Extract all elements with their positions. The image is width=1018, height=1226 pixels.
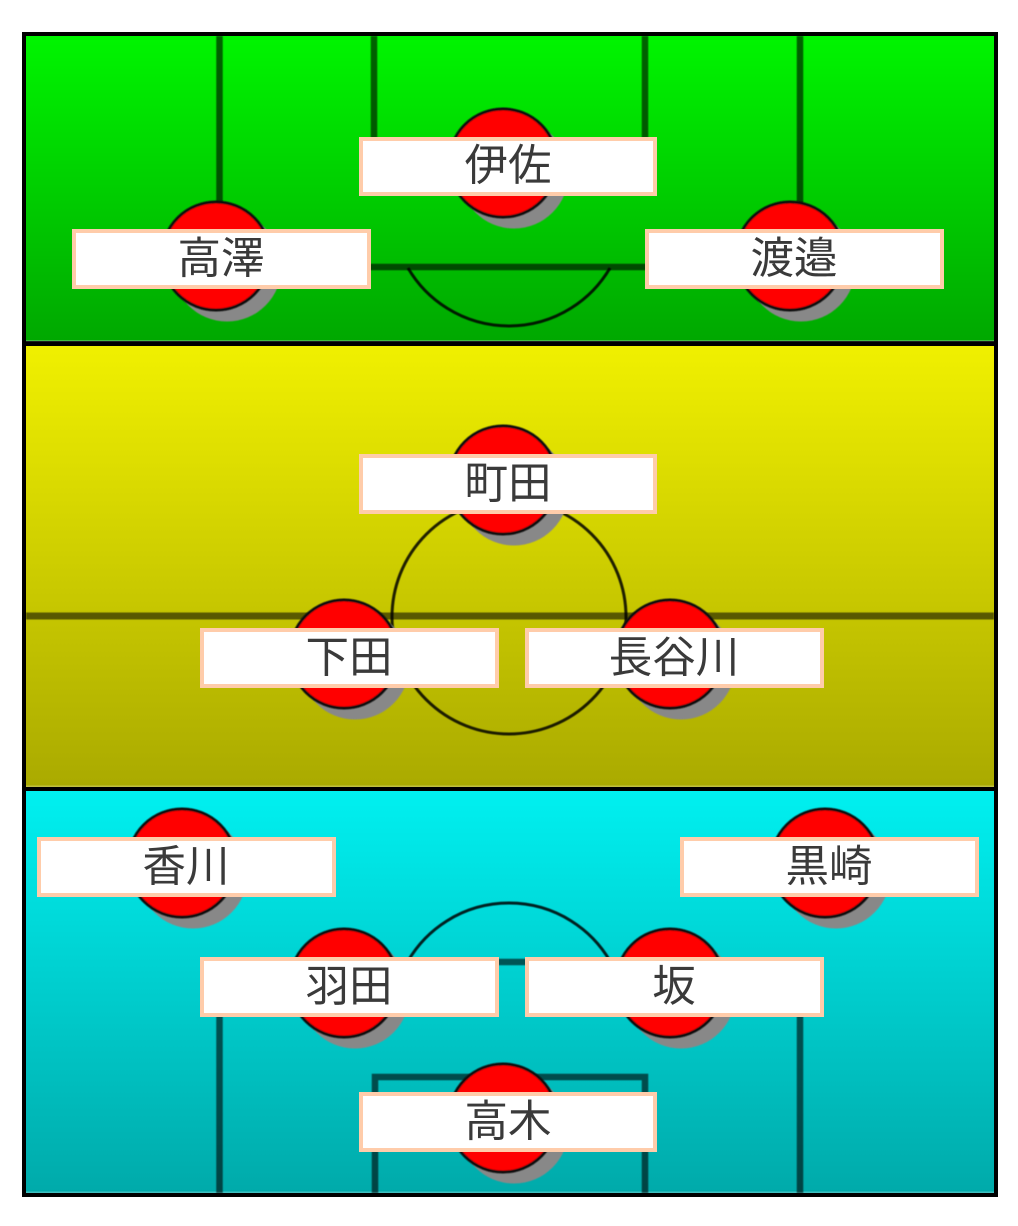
- player: 伊佐: 伊佐: [464, 142, 552, 190]
- player: 黒崎: 黒崎: [786, 844, 872, 892]
- player: 高木: [361, 1064, 655, 1184]
- player: 羽田: [202, 929, 497, 1048]
- player: 渡邉: 渡邉: [750, 236, 838, 284]
- player: 下田: [202, 600, 497, 720]
- player: 高木: 高木: [464, 1098, 552, 1146]
- player: 下田: 下田: [306, 634, 392, 682]
- panel: defenders (cyan): [26, 791, 994, 1193]
- player: 香川: 香川: [142, 844, 230, 892]
- player: 黒崎: [682, 809, 977, 928]
- panel: midfielders (yellow): [26, 346, 994, 787]
- player: 渡邉: [647, 202, 942, 322]
- player: 高澤: [74, 202, 369, 322]
- player: 伊佐: [361, 109, 655, 228]
- player: 羽田: 羽田: [306, 964, 392, 1012]
- player: 町田: 町田: [464, 460, 552, 508]
- player: 坂: [527, 929, 822, 1048]
- player: 長谷川: [527, 600, 822, 720]
- player: 高澤: 高澤: [178, 236, 264, 284]
- panel: forwards (green): [26, 36, 994, 342]
- player: 長谷川: 長谷川: [609, 634, 739, 682]
- player: 坂: 坂: [652, 964, 696, 1012]
- player: 香川: [39, 809, 334, 928]
- player: 町田: [361, 426, 655, 546]
